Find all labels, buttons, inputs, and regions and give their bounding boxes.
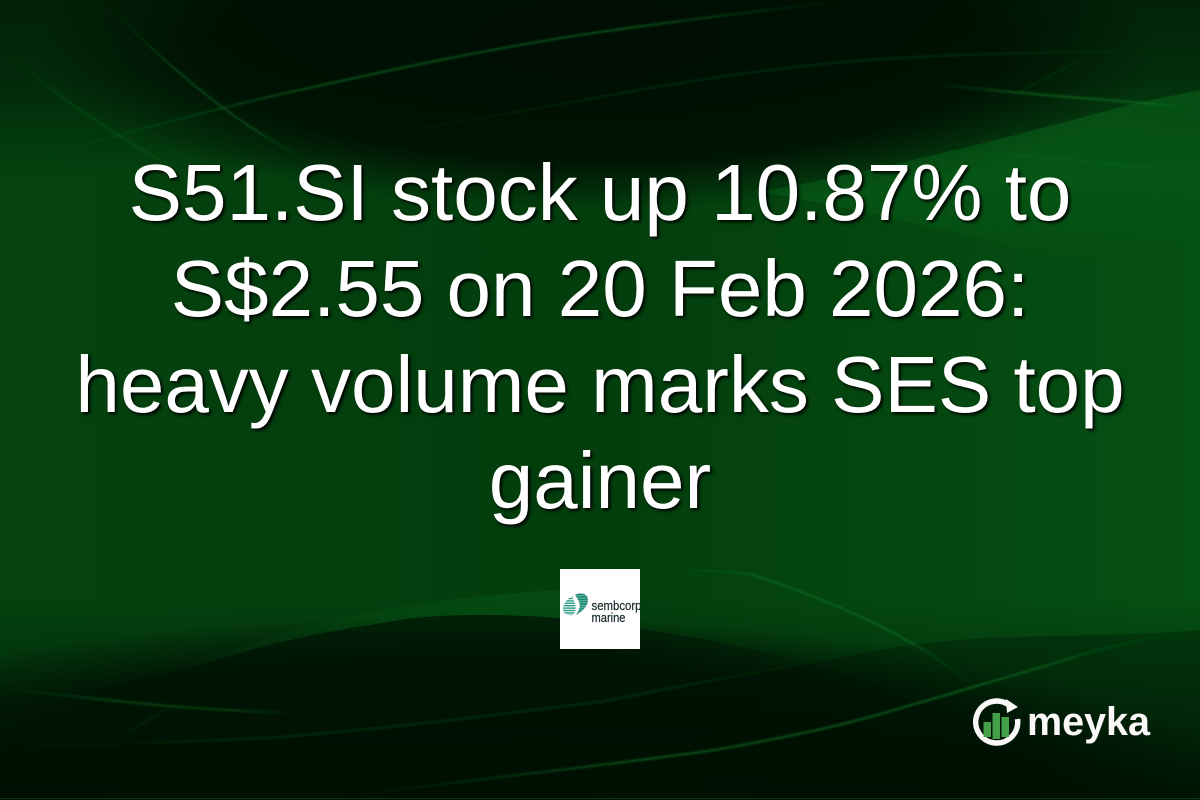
title: heavy volume marks SES top xyxy=(75,340,1125,429)
logo: sembcorp marine: marine xyxy=(592,610,626,625)
title: gainer xyxy=(489,436,711,525)
title xyxy=(75,148,1126,528)
logo: sembcorp marine xyxy=(560,569,640,649)
title: S51.SI stock up 10.87% to xyxy=(129,148,1071,237)
title: S$2.55 on 20 Feb 2026: xyxy=(171,244,1029,333)
icon: circular arrow with bars xyxy=(976,699,1018,743)
brand: meyka logo xyxy=(973,698,1151,746)
wordmark: meyka xyxy=(1027,700,1151,744)
